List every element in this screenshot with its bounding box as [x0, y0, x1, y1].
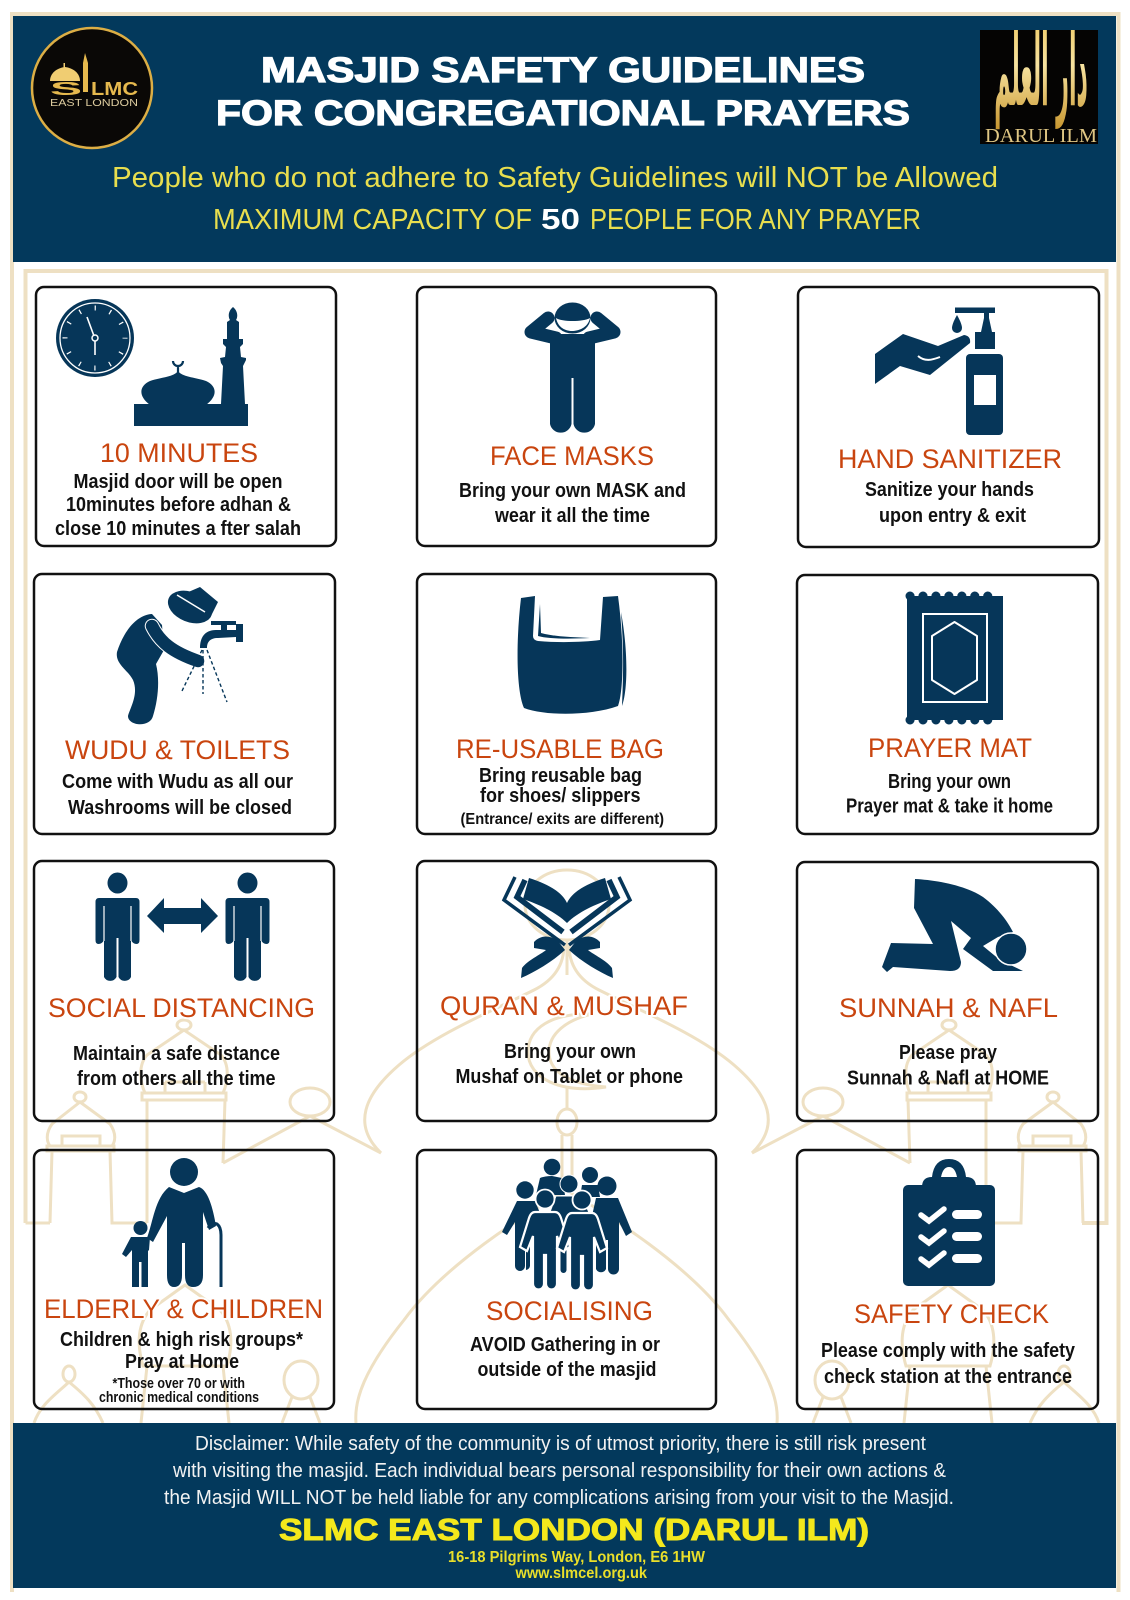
logo: SLMC East London: S — [50, 79, 82, 99]
heading: quran and mushaf: QURAN & MUSHAF — [440, 991, 688, 1021]
panel: re-usable bag — [417, 574, 716, 834]
logo: SLMC East London: LMC — [91, 79, 138, 99]
disclaimer text: Disclaimer: While safety of the community is of utmost priority, there is still risk present — [195, 1433, 926, 1455]
text block: 10 minutes — [55, 471, 301, 540]
text block: social distancing: from others all the time — [77, 1068, 276, 1090]
address and website — [448, 1549, 706, 1582]
text block: elderly and children: *Those over 70 or with — [112, 1375, 245, 1392]
icon: bag — [518, 596, 626, 714]
text block: re-usable bag — [460, 765, 664, 828]
text block: safety check: check station at the entrance — [824, 1366, 1072, 1388]
text block: wudu: Washrooms will be closed — [68, 797, 292, 819]
text block: sunnah and nafl: Please pray — [899, 1042, 998, 1064]
text block: safety check: Please comply with the safety — [821, 1340, 1076, 1362]
logo: Darul Ilm — [980, 13, 1098, 147]
heading: hand sanitizer: HAND SANITIZER — [838, 444, 1062, 474]
logo: Darul Ilm: DARUL ILM — [985, 125, 1097, 147]
heading: 10 minutes: 10 MINUTES — [100, 438, 258, 468]
text block: 10 minutes: 10minutes before adhan & — [66, 494, 291, 516]
organisation name: SLMC EAST LONDON (DARUL ILM) — [279, 1512, 869, 1547]
text block: socialising: outside of the masjid — [478, 1359, 656, 1381]
logo: SLMC East London: EAST LONDON — [50, 98, 138, 109]
text block: safety check — [821, 1340, 1076, 1388]
text block: wudu: Come with Wudu as all our — [62, 771, 293, 793]
text block: re-usable bag: Bring reusable bag — [479, 765, 642, 787]
panel: hand sanitizer — [798, 287, 1099, 547]
subtitle: maximum capacity — [213, 204, 921, 236]
text block: elderly and children: Children & high risk groups* — [60, 1329, 303, 1351]
heading: socialising: SOCIALISING — [486, 1296, 653, 1326]
icon: clipboard checklist — [903, 1159, 995, 1286]
title — [216, 51, 910, 133]
subtitle: maximum capacity: 50 — [541, 204, 580, 236]
icon: open quran on stand — [504, 877, 630, 978]
text block: hand sanitizer: Sanitize your hands — [865, 479, 1034, 501]
subtitle: maximum capacity: MAXIMUM CAPACITY OF — [213, 204, 532, 236]
icon: clock — [56, 299, 134, 377]
title: MASJID SAFETY GUIDELINES — [261, 51, 865, 90]
address and website: 16-18 Pilgrims Way, London, E6 1HW — [448, 1549, 706, 1566]
text block: quran and mushaf: Mushaf on Tablet or phone — [456, 1066, 683, 1088]
icon: prayer mat — [907, 596, 1003, 720]
text block: prayer mat: Prayer mat & take it home — [846, 796, 1053, 818]
panel: 10 minutes — [36, 287, 336, 546]
icon: two people with arrow — [96, 872, 270, 981]
heading: elderly and children: ELDERLY & CHILDREN — [44, 1294, 323, 1324]
heading: social distancing: SOCIAL DISTANCING — [48, 993, 315, 1023]
text block: 10 minutes: Masjid door will be open — [74, 471, 282, 493]
panel: wudu and toilets — [34, 574, 335, 834]
disclaimer text — [164, 1433, 954, 1509]
text block: socialising: AVOID Gathering in or — [470, 1334, 660, 1356]
text block: re-usable bag: for shoes/ slippers — [480, 785, 640, 807]
text block: 10 minutes: close 10 minutes a fter salah — [55, 518, 301, 540]
text block: social distancing: Maintain a safe distance — [73, 1043, 280, 1065]
heading: wudu and toilets: WUDU & TOILETS — [65, 735, 290, 765]
icon: mosque — [134, 307, 248, 426]
text block: face masks: Bring your own MASK and — [459, 480, 686, 502]
icon: crowd of people — [502, 1159, 632, 1291]
text block: prayer mat: Bring your own — [888, 771, 1011, 793]
panel: social distancing — [34, 861, 334, 1121]
text block: quran and mushaf — [456, 1041, 683, 1088]
heading: safety check: SAFETY CHECK — [854, 1299, 1049, 1329]
logo: Darul Ilm: دار العلم — [994, 13, 1088, 130]
header band — [13, 13, 1116, 262]
panel: sunnah and nafl — [797, 862, 1098, 1121]
logo: SLMC East London — [32, 28, 152, 148]
panel: quran and mushaf — [417, 861, 716, 1121]
disclaimer text: with visiting the masjid. Each individual bears personal responsibility for their own actions & — [172, 1460, 947, 1482]
heading: face masks: FACE MASKS — [490, 441, 654, 471]
panel: prayer mat — [797, 575, 1098, 834]
text block: elderly and children — [60, 1329, 303, 1406]
subtitle: warning: People who do not adhere to Safety Guidelines will NOT be Allowed — [112, 162, 998, 194]
heading: prayer mat: PRAYER MAT — [868, 733, 1032, 763]
text block: quran and mushaf: Bring your own — [504, 1041, 636, 1063]
title: FOR CONGREGATIONAL PRAYERS — [216, 94, 910, 133]
text block: elderly and children: Pray at Home — [125, 1351, 239, 1373]
icon: person washing at a tap — [117, 584, 243, 724]
panel: face masks — [417, 287, 716, 546]
subtitle: maximum capacity: PEOPLE FOR ANY PRAYER — [590, 204, 921, 236]
text block: elderly and children: chronic medical conditions — [99, 1389, 259, 1406]
text block: prayer mat — [846, 771, 1053, 818]
icon: person wearing a mask — [531, 302, 614, 433]
text block: sunnah and nafl: Sunnah & Nafl at HOME — [847, 1068, 1049, 1090]
text block: hand sanitizer — [865, 479, 1034, 527]
panel: elderly and children — [34, 1150, 334, 1409]
disclaimer text: the Masjid WILL NOT be held liable for any complications arising from your visit to the Masjid. — [164, 1487, 954, 1509]
text block: face masks: wear it all the time — [494, 505, 650, 527]
text block: sunnah and nafl — [847, 1042, 1049, 1090]
text block: face masks — [459, 480, 686, 527]
panel: safety check — [797, 1150, 1098, 1409]
icon: person in prostration — [882, 879, 1027, 972]
icon: elderly person with child — [122, 1158, 221, 1287]
text block: hand sanitizer: upon entry & exit — [879, 505, 1026, 527]
text block: social distancing — [73, 1043, 280, 1090]
text block: socialising — [470, 1334, 660, 1381]
panel: socialising — [417, 1150, 716, 1409]
text block: wudu — [62, 771, 293, 819]
heading: re-usable bag: RE-USABLE BAG — [456, 734, 664, 764]
text block: re-usable bag: (Entrance/ exits are different) — [460, 811, 664, 828]
heading: sunnah and nafl: SUNNAH & NAFL — [839, 993, 1058, 1023]
icon: hand and sanitizer bottle — [875, 308, 1003, 435]
address and website: www.slmcel.org.uk — [515, 1565, 647, 1582]
footer band — [13, 1423, 1116, 1588]
